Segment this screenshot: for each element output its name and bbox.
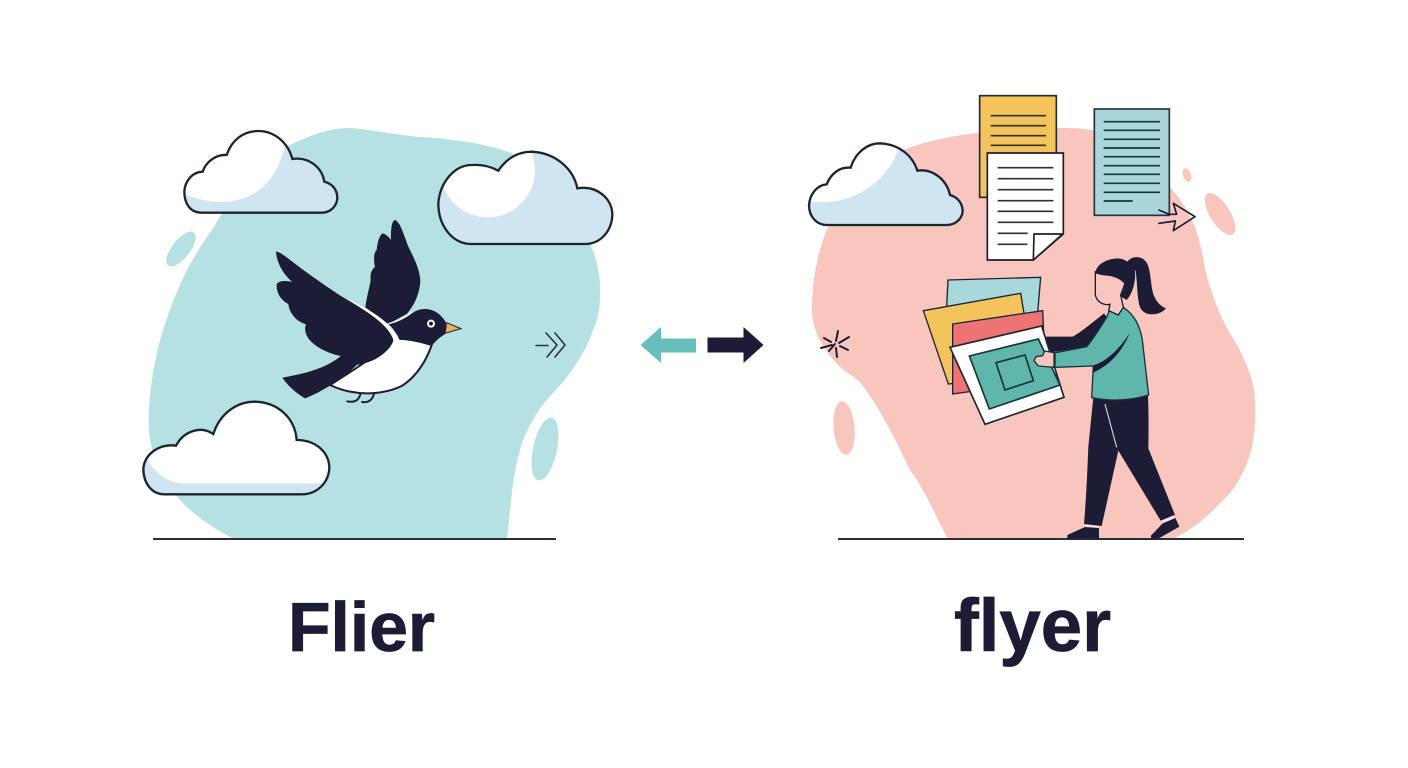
teal background blob [149,128,600,539]
flyer inner square [996,355,1033,390]
small teal leaf left [161,227,201,271]
icon: flying bird [276,220,461,402]
icon: sketched arrow [1159,203,1195,231]
yellow sheet [923,293,1034,384]
red sheet [953,311,1044,394]
title: flyer: flyer [954,584,1111,667]
pants [1084,395,1175,526]
dark right arrow [708,327,764,363]
yellow document [980,96,1056,197]
eye [427,320,435,328]
shirt crease [1093,333,1130,373]
beak [445,323,461,333]
title: Flier: Flier [288,588,435,666]
belly [330,338,432,393]
near wing [276,252,393,398]
blue sheet [945,277,1041,340]
hair [1095,257,1166,314]
small pink leaf right [1199,188,1241,240]
stack of documents [980,96,1195,260]
teal document [1094,109,1169,215]
shirt [1055,307,1149,400]
right ground line [838,538,1244,540]
infographic canvas [142,94,1256,667]
small teal leaf right [527,415,563,483]
shoes [1067,518,1179,539]
teal flyer panel [969,339,1060,409]
far wing [365,220,420,324]
legs [347,393,374,402]
teal left arrow [640,327,696,363]
hand [1034,351,1054,367]
cloud top left [173,127,337,213]
small pink leaf left [831,400,857,456]
icon: sparkle [821,331,849,357]
person holding flyers [923,257,1179,539]
white document [987,153,1063,260]
head [388,309,446,346]
cloud top right [437,150,614,246]
white neck stripe [388,312,413,324]
icon: motion chevrons [536,333,565,357]
small pink dot [1181,167,1193,183]
pink background blob [812,128,1255,539]
white flyer [950,326,1064,424]
cloud on pink side [805,135,963,225]
cloud bottom left [142,400,330,496]
left ground line [153,538,556,540]
back arm [1046,313,1112,353]
socks [1086,515,1175,529]
face [1095,270,1125,315]
